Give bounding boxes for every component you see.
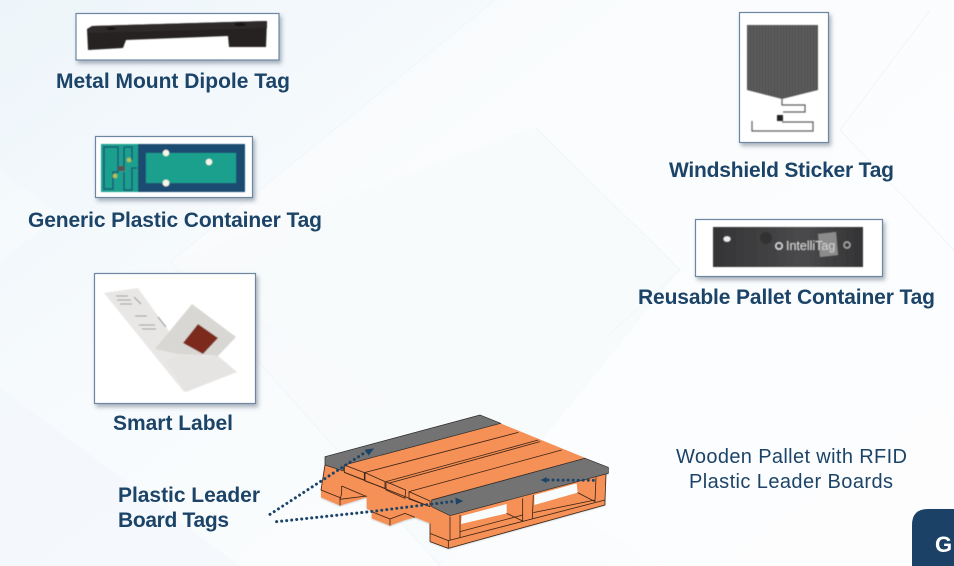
caption: wooden pallet: Wooden Pallet with RFID [676, 446, 907, 468]
corner badge [912, 509, 954, 566]
corner badge: G [935, 532, 952, 557]
panel: smart label [94, 274, 256, 435]
pallet outlines [321, 432, 606, 548]
panel: reusable pallet container tag [638, 220, 935, 309]
image card [696, 220, 882, 276]
leader board: front [432, 458, 608, 516]
caption: wooden pallet: Plastic Leader Boards [689, 471, 893, 493]
pallet openings [461, 483, 578, 524]
callout: plastic leader board tags [118, 484, 260, 532]
dotted callout arrows [270, 448, 593, 522]
icon: peeled smart label [104, 288, 237, 392]
caption: wooden pallet [676, 446, 907, 493]
label: Reusable Pallet Container Tag [638, 286, 935, 309]
callout: plastic leader board tags: Plastic Leader [118, 484, 260, 507]
icon: black tag with logo [713, 227, 863, 267]
label: Smart Label [113, 412, 233, 435]
panel: windshield sticker tag [669, 12, 894, 182]
icon: black dipole tag [87, 21, 267, 50]
label: Metal Mount Dipole Tag [56, 70, 290, 93]
chart: wooden pallet illustration [270, 415, 608, 548]
icon: sticker antenna [747, 25, 818, 131]
icon: black tag with logo: IntelliTag [786, 239, 835, 253]
icon: green circuit tag [101, 144, 245, 192]
label: Generic Plastic Container Tag [28, 209, 322, 232]
panel: generic plastic container tag [28, 136, 322, 232]
image card [94, 274, 256, 404]
panel: metal mount dipole tag [56, 14, 290, 93]
image card [76, 14, 279, 60]
leader board: back [325, 415, 501, 471]
label: Windshield Sticker Tag [669, 159, 894, 182]
pallet body [321, 415, 608, 548]
image card [740, 12, 828, 142]
image card [96, 136, 252, 198]
callout: plastic leader board tags: Board Tags [118, 509, 229, 532]
